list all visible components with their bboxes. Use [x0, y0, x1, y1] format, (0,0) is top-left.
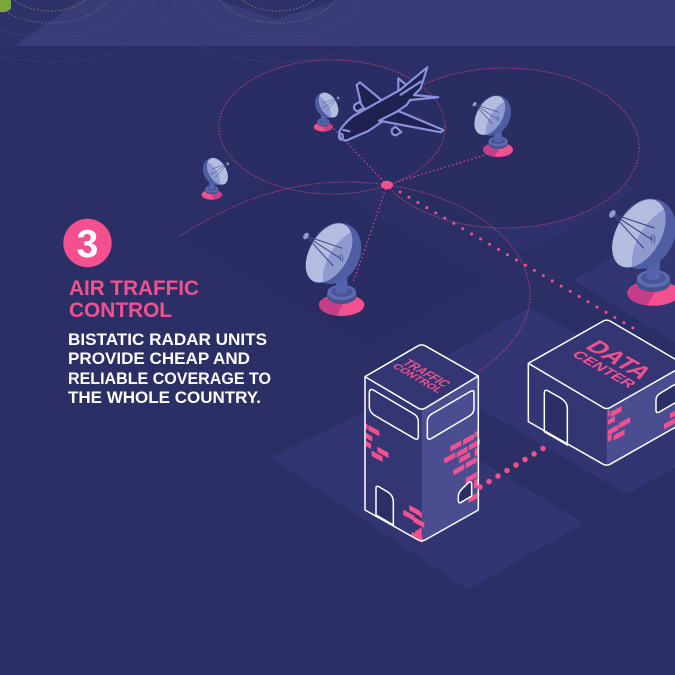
heading: AIR TRAFFIC — [69, 277, 199, 300]
building: data center — [528, 319, 675, 466]
label: traffic: TRAFFIC — [399, 357, 454, 389]
door — [376, 486, 393, 525]
number badge — [63, 219, 112, 267]
window: right — [427, 391, 474, 439]
thick dotted link to data center — [400, 192, 633, 328]
label: center: CENTER — [568, 349, 640, 391]
body text: RELIABLE COVERAGE TO — [68, 370, 271, 388]
dotted link between buildings — [480, 443, 552, 487]
icon: radar dish near plane — [311, 89, 342, 132]
number badge: 3 — [77, 223, 98, 266]
heading — [69, 277, 199, 322]
body text: PROVIDE CHEAP AND — [68, 350, 250, 368]
icon: radar dish far left — [199, 154, 232, 200]
building: traffic control — [365, 344, 480, 543]
bricks: right face — [444, 434, 480, 503]
body text: THE WHOLE COUNTRY. — [68, 389, 261, 407]
body text — [68, 331, 271, 407]
door — [544, 390, 567, 445]
icon: radar dish upper right — [468, 90, 517, 157]
signal node — [381, 181, 393, 189]
body text: BISTATIC RADAR UNITS — [68, 331, 267, 349]
icon: airplane — [339, 67, 443, 141]
icon: radar dish large center — [296, 214, 371, 316]
window — [656, 384, 675, 413]
label: data: DATA — [579, 337, 658, 383]
label: control: CONTROL — [389, 363, 445, 395]
bricks: left face — [366, 423, 424, 543]
building outline — [528, 320, 675, 465]
icon: radar dish large right — [601, 189, 675, 306]
top band: previous section ground — [0, 0, 675, 62]
bricks: data center — [608, 406, 675, 442]
building outline — [365, 345, 478, 541]
window: left — [369, 390, 418, 439]
small window — [458, 482, 472, 503]
thin signal lines — [333, 128, 485, 283]
radar coverage ellipses — [180, 60, 639, 372]
heading: CONTROL — [69, 299, 172, 322]
ground tiles — [184, 123, 675, 586]
